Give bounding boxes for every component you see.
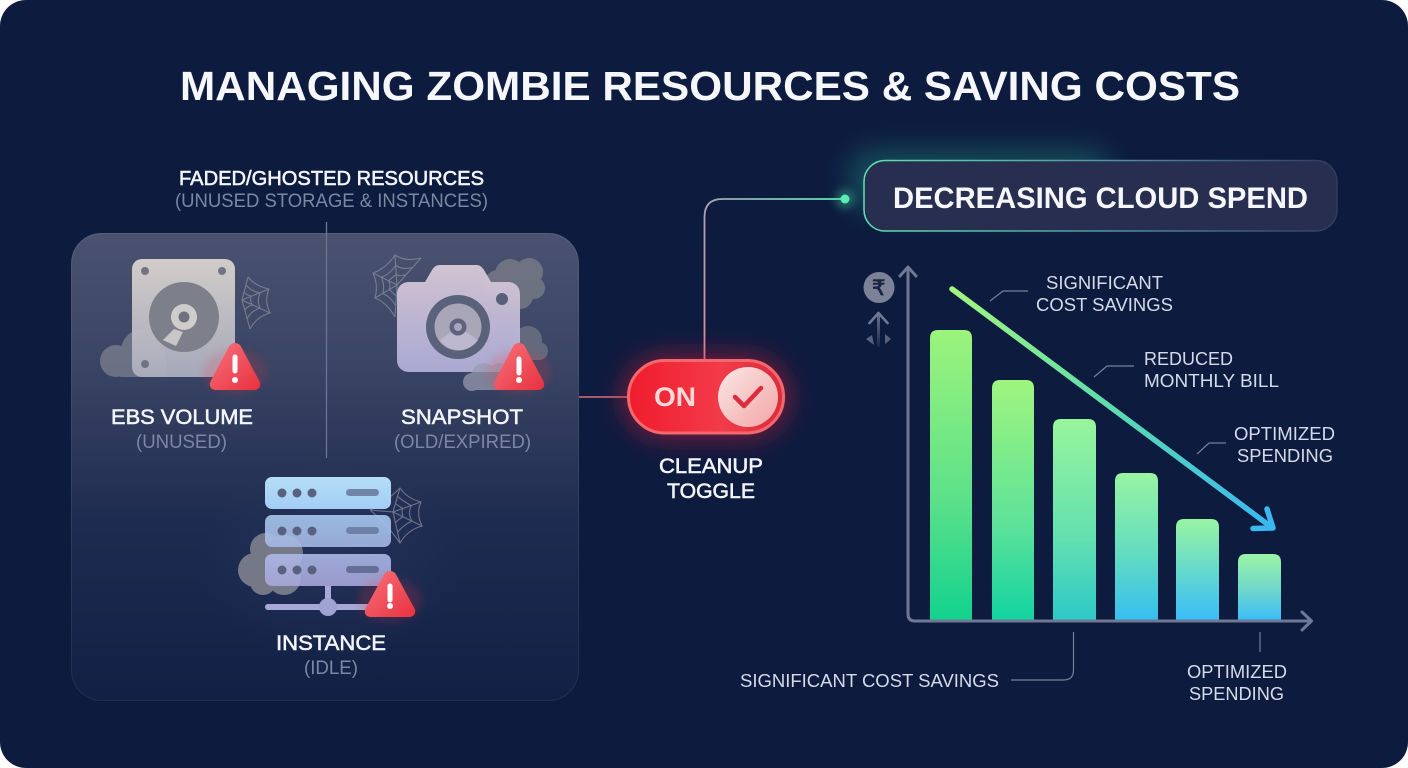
- callout: optimized spending right: [1197, 423, 1335, 466]
- panel: ghosted resources: [72, 222, 578, 700]
- section heading: faded resources: FADED/GHOSTED RESOURCES: [179, 168, 484, 190]
- icon: warning on instance: [358, 571, 422, 622]
- label: instance: (IDLE): [304, 657, 358, 679]
- callout: optimized spending right: SPENDING: [1237, 445, 1333, 466]
- heading box: decreasing cloud spend: [850, 150, 1337, 231]
- icon: warning on snapshot: [487, 343, 551, 394]
- bars: [930, 330, 1281, 620]
- label: cleanup toggle: [659, 454, 763, 503]
- callout: optimized spending bottom: SPENDING: [1189, 683, 1284, 704]
- icon: warning on EBS volume: [203, 343, 267, 394]
- callout: significant cost savings: SIGNIFICANT: [1046, 272, 1163, 293]
- label: snapshot: (OLD/EXPIRED): [394, 431, 531, 453]
- icon: EBS volume hard drive: [100, 259, 270, 377]
- toggle: cleanup on: ON: [654, 382, 696, 412]
- heading box: decreasing cloud spend: DECREASING CLOUD SPEND: [893, 182, 1308, 215]
- icon: rupee currency: [864, 272, 894, 347]
- label: EBS volume: [111, 405, 253, 453]
- label: instance: INSTANCE: [276, 631, 386, 655]
- section heading: faded resources: [175, 168, 488, 212]
- callout: optimized spending right: OPTIMIZED: [1234, 423, 1335, 444]
- trend arrow: [952, 289, 1273, 528]
- icon: idle instance server: [238, 477, 422, 616]
- callout: reduced monthly bill: REDUCED: [1144, 348, 1233, 369]
- bar chart: decreasing spend: [900, 267, 1312, 630]
- label: snapshot: SNAPSHOT: [401, 405, 523, 429]
- label: instance: [276, 631, 386, 679]
- label: cleanup toggle: TOGGLE: [667, 479, 755, 503]
- callout: optimized spending bottom: OPTIMIZED: [1187, 661, 1287, 682]
- connector: toggle to cloud spend: [704, 189, 855, 360]
- label: EBS volume: (UNUSED): [136, 431, 227, 453]
- title: MANAGING ZOMBIE RESOURCES & SAVING COSTS: [180, 63, 1240, 109]
- label: cleanup toggle: CLEANUP: [659, 454, 763, 478]
- label: EBS volume: EBS VOLUME: [111, 405, 253, 429]
- callout: significant cost savings: COST SAVINGS: [1036, 294, 1173, 315]
- label: snapshot: [394, 405, 531, 453]
- callout: reduced monthly bill: MONTHLY BILL: [1144, 370, 1279, 391]
- section heading: faded resources: (UNUSED STORAGE & INSTANCES): [175, 190, 488, 212]
- callout: optimized spending bottom: [1187, 632, 1287, 704]
- callout: significant cost savings bottom: SIGNIFICANT COST SAVINGS: [740, 670, 999, 691]
- icon: rupee currency: ₹: [872, 277, 885, 300]
- chart axes: [900, 267, 1312, 630]
- icon: snapshot camera: [373, 255, 548, 391]
- callout: significant cost savings bottom: [740, 632, 1074, 691]
- connector: panel to toggle: [579, 396, 628, 398]
- callout: significant cost savings: [990, 272, 1173, 315]
- toggle: cleanup on: [624, 357, 788, 437]
- callout: reduced monthly bill: [1094, 348, 1279, 391]
